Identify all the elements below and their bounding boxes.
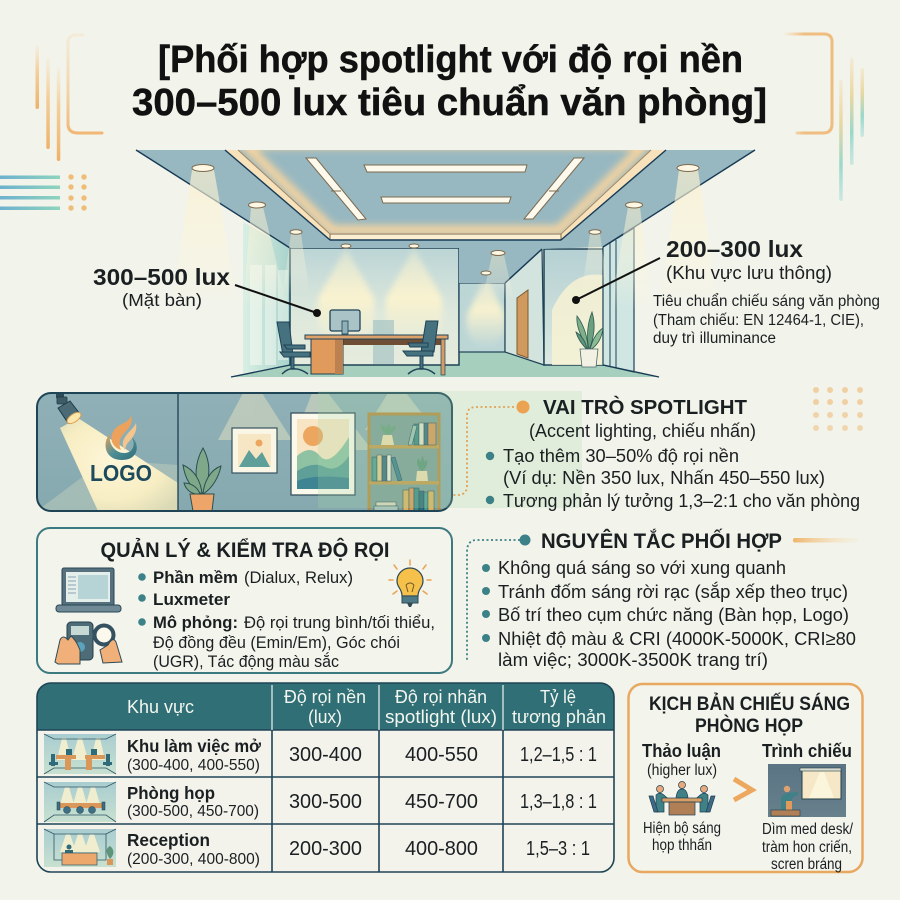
ceiling linear lights <box>306 158 584 220</box>
bullet list: (Ví dụ: Nền 350 lux, Nhấn 450–550 lux) <box>503 467 825 488</box>
bullet list: Mô phỏng: <box>153 613 238 632</box>
bullet list: Luxmeter <box>153 590 230 609</box>
bullet list <box>482 557 856 670</box>
scenario: presentation: scren bráng <box>771 856 842 873</box>
subheading: (Accent lighting, chiếu nhấn) <box>529 421 756 441</box>
decoration: left stripes and dots <box>0 174 87 211</box>
table grid <box>37 683 614 872</box>
panel: coordination principles <box>467 529 858 670</box>
bullet list: (UGR), Tác động màu sắc <box>153 652 339 671</box>
scenario: discussion: họp thhấn <box>652 837 712 854</box>
logo spotlight beam <box>60 418 178 511</box>
thumbnail: meeting room <box>44 782 116 822</box>
header row: Khu vực <box>127 697 194 717</box>
small framed picture <box>232 428 277 473</box>
connector: teal dotted line <box>467 540 520 662</box>
ceiling <box>136 150 755 283</box>
heading: QUẢN LÝ & KIỂM TRA ĐỘ RỌI <box>100 538 390 562</box>
bullet list: Độ đồng đều (Emin/Em), Góc chói <box>153 633 400 652</box>
thumbnail: open workspace <box>44 734 116 774</box>
thumbnail: reception <box>44 829 116 867</box>
callout: 300-500 lux <box>93 264 321 317</box>
marker: teal dot <box>520 534 530 546</box>
row: open workspace <box>127 736 597 774</box>
row: open workspace: 400-550 <box>405 744 478 766</box>
decoration: top right bracket and light strips <box>785 34 864 201</box>
row: meeting room: 300-500 <box>289 791 362 813</box>
scenario: presentation: tràm hon criến, <box>762 839 852 856</box>
header row: Tỷ lệ <box>540 687 576 707</box>
title <box>132 39 767 124</box>
logo text: LOGO <box>90 460 152 486</box>
downlights <box>172 164 718 310</box>
icon: light bulb <box>389 560 431 607</box>
spotlight fixture <box>56 394 82 424</box>
table: zones and lux levels <box>37 683 614 872</box>
callout: 300-500 lux: 300–500 lux <box>93 264 230 290</box>
panel: meeting room lighting scenarios <box>628 684 862 873</box>
scenario: presentation: Trình chiếu <box>762 740 852 761</box>
cove light <box>225 144 666 240</box>
bullet list: Độ rọi trung bình/tối thiểu, <box>244 613 435 632</box>
bullet list: Tránh đốm sáng rời rạc (sắp xếp theo trục) <box>498 581 848 602</box>
row: reception: (200-300, 400-800) <box>127 851 260 868</box>
row: reception: Reception <box>127 830 210 850</box>
bullet list: Tạo thêm 30–50% độ rọi nền <box>503 445 739 466</box>
art spot beams <box>218 393 435 450</box>
marker: orange dot <box>516 400 530 414</box>
floor <box>231 352 659 377</box>
heading: PHÒNG HỌP <box>695 715 803 737</box>
back wall with wash lights <box>290 248 459 365</box>
bullet list: Không quá sáng so với xung quanh <box>498 557 786 578</box>
logo mark <box>106 415 137 460</box>
header row: tương phản <box>512 707 606 727</box>
heading accent <box>793 538 858 542</box>
header row: Độ rọi nền <box>284 687 366 707</box>
title: 300–500 lux tiêu chuẩn văn phòng] <box>132 82 767 124</box>
bullet list: (Dialux, Relux) <box>244 568 353 587</box>
arrow: greater-than chevron <box>734 779 752 800</box>
standards note: Tiêu chuẩn chiếu sáng văn phòng <box>653 293 880 310</box>
panel: spotlight illustration <box>37 393 452 514</box>
heading: NGUYÊN TẮC PHỐI HỢP <box>541 529 782 553</box>
large framed picture <box>291 413 355 495</box>
callout: 200-300 lux: (Khu vực lưu thông) <box>666 263 832 283</box>
scenario: discussion: (higher lux) <box>647 762 717 779</box>
callout: 300-500 lux: (Mặt bàn) <box>122 290 202 310</box>
standards note <box>653 293 880 347</box>
icon: team at table <box>649 782 715 815</box>
callout: 200-300 lux: 200–300 lux <box>666 236 803 262</box>
row: reception <box>127 830 590 868</box>
callout: 200-300 lux <box>572 236 832 304</box>
left glass side wall <box>243 222 290 373</box>
decoration: pale green watermark patch <box>318 391 582 508</box>
icon: projection room <box>768 764 846 817</box>
bullet list: Phần mềm <box>153 568 238 587</box>
heading <box>649 693 850 737</box>
bullet list: Bố trí theo cụm chức năng (Bàn họp, Logo) <box>498 604 849 625</box>
row: meeting room: 1,3–1,8 : 1 <box>520 791 597 813</box>
row: reception: 1,5–3 : 1 <box>526 838 590 860</box>
header row: spotlight (lux) <box>385 707 497 727</box>
potted plant <box>576 312 603 367</box>
scenario: discussion: Hiện bộ sáng <box>643 820 721 837</box>
bullet list: Nhiệt độ màu & CRI (4000K-5000K, CRI≥80 <box>498 628 856 649</box>
decoration: top left light strips and bracket <box>36 35 102 161</box>
icon: luxmeter in hands <box>55 622 122 664</box>
office chairs <box>277 321 438 374</box>
row: open workspace: Khu làm việc mở <box>127 736 262 756</box>
panel: spotlight role <box>452 395 860 511</box>
row: open workspace: 1,2–1,5 : 1 <box>520 744 597 766</box>
title: [Phối hợp spotlight với độ rọi nền <box>158 39 743 81</box>
scenario: discussion <box>642 740 721 854</box>
row: meeting room <box>127 783 597 820</box>
floor line <box>231 365 659 377</box>
heading: KỊCH BẢN CHIẾU SÁNG <box>649 693 850 715</box>
header row: Độ rọi nhãn <box>395 687 487 707</box>
icon: laptop <box>56 568 121 612</box>
row: meeting room: (300-500, 450-700) <box>127 803 259 820</box>
right wall and glass <box>544 228 634 372</box>
bullet list <box>486 445 860 511</box>
row: open workspace: 300-400 <box>289 744 362 766</box>
header row <box>127 687 606 727</box>
plant in pot <box>183 448 221 511</box>
scenario: discussion: Thảo luận <box>642 740 721 761</box>
scenario: presentation <box>762 740 854 873</box>
row: open workspace: (300-400, 400-550) <box>127 757 260 774</box>
corridor <box>459 249 544 365</box>
decoration: right dots <box>813 387 863 431</box>
bullet list: Tương phản lý tưởng 1,3–2:1 cho văn phòng <box>503 490 860 511</box>
scenario: presentation: Dìm med desk/ <box>762 821 854 838</box>
row: reception: 200-300 <box>289 838 362 860</box>
illustration: office interior with ceiling lighting <box>93 144 880 377</box>
row: meeting room: Phòng họp <box>127 783 215 803</box>
desk and monitor <box>305 310 448 375</box>
header row: (lux) <box>308 707 342 727</box>
standards note: duy trì illuminance <box>653 330 776 347</box>
panel: management and checking <box>37 528 452 673</box>
standards note: (Tham chiếu: EN 12464-1, CIE), <box>653 312 864 329</box>
bullet list: làm việc; 3000K-3500K trang trí) <box>498 649 768 670</box>
ceiling edge lines <box>136 150 755 283</box>
row: reception: 400-800 <box>405 838 478 860</box>
row: meeting room: 450-700 <box>405 791 478 813</box>
bullet list <box>138 568 435 671</box>
heading: VAI TRÒ SPOTLIGHT <box>543 395 747 419</box>
bookshelf <box>369 414 439 514</box>
connector: orange dotted line <box>452 407 523 495</box>
